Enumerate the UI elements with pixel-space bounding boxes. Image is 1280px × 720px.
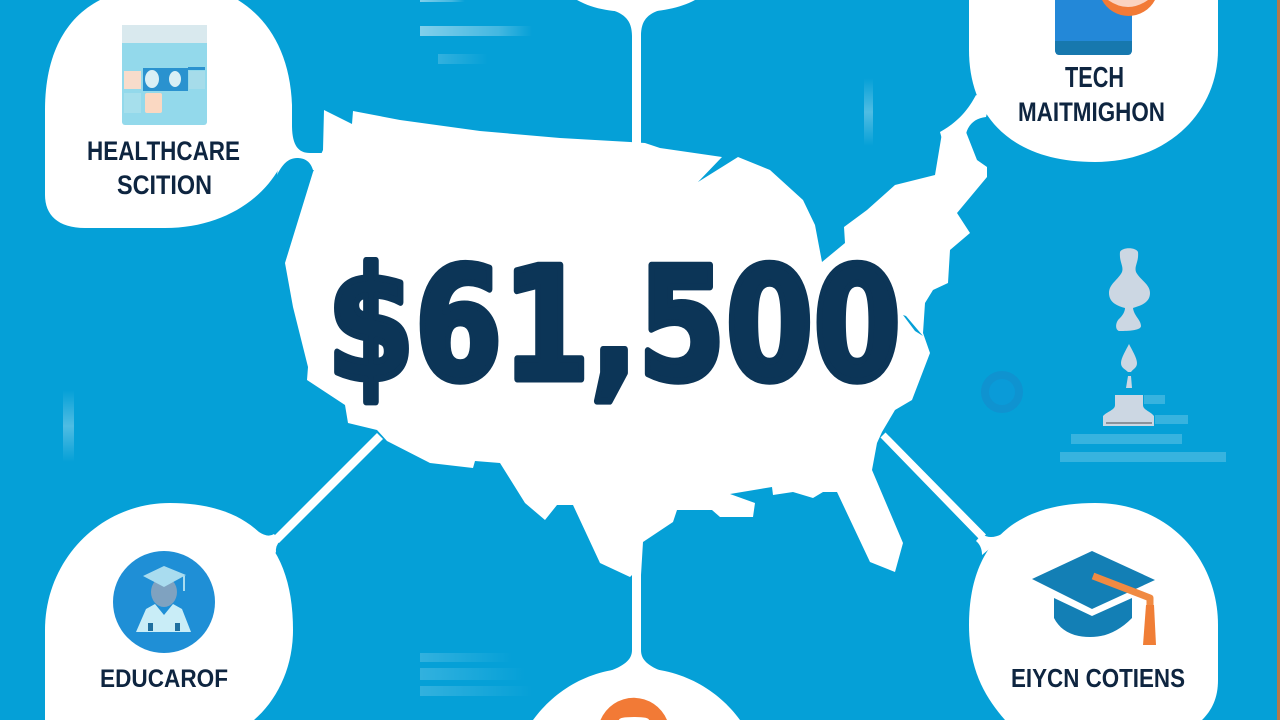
label: healthcare: HEALTHCARE <box>87 136 240 166</box>
icon: orange ring <box>600 698 667 720</box>
icon: tech device <box>1055 0 1155 55</box>
icon: healthcare grid <box>122 25 207 125</box>
icon: faint ring <box>985 375 1019 409</box>
panel: educator <box>45 503 293 720</box>
decorative faded bars <box>63 0 873 696</box>
label: eiycn cotiens: EIYCN COTIENS <box>1011 663 1185 693</box>
panel: healthcare <box>45 0 292 228</box>
icon: flask and lamp shape <box>1103 248 1154 426</box>
panel: tech <box>969 0 1218 162</box>
label: tech: TECH <box>1065 62 1124 94</box>
icon: graduation cap <box>1032 551 1156 645</box>
map of the United States <box>285 110 987 577</box>
decorative bars under flask <box>1060 395 1226 462</box>
label: scition: SCITION <box>117 170 212 200</box>
label: educarof: EDUCAROF <box>100 665 228 693</box>
panel: education <box>969 503 1218 720</box>
icon: graduate in circle <box>113 551 215 653</box>
map coast sliver <box>903 315 923 336</box>
label: maitmighon: MAITMIGHON <box>1018 97 1165 127</box>
main figure: $61,500 <box>327 234 901 416</box>
connector lines <box>259 0 1002 672</box>
panel: bottom bubble <box>533 668 740 720</box>
panel: top bubble <box>577 0 695 12</box>
